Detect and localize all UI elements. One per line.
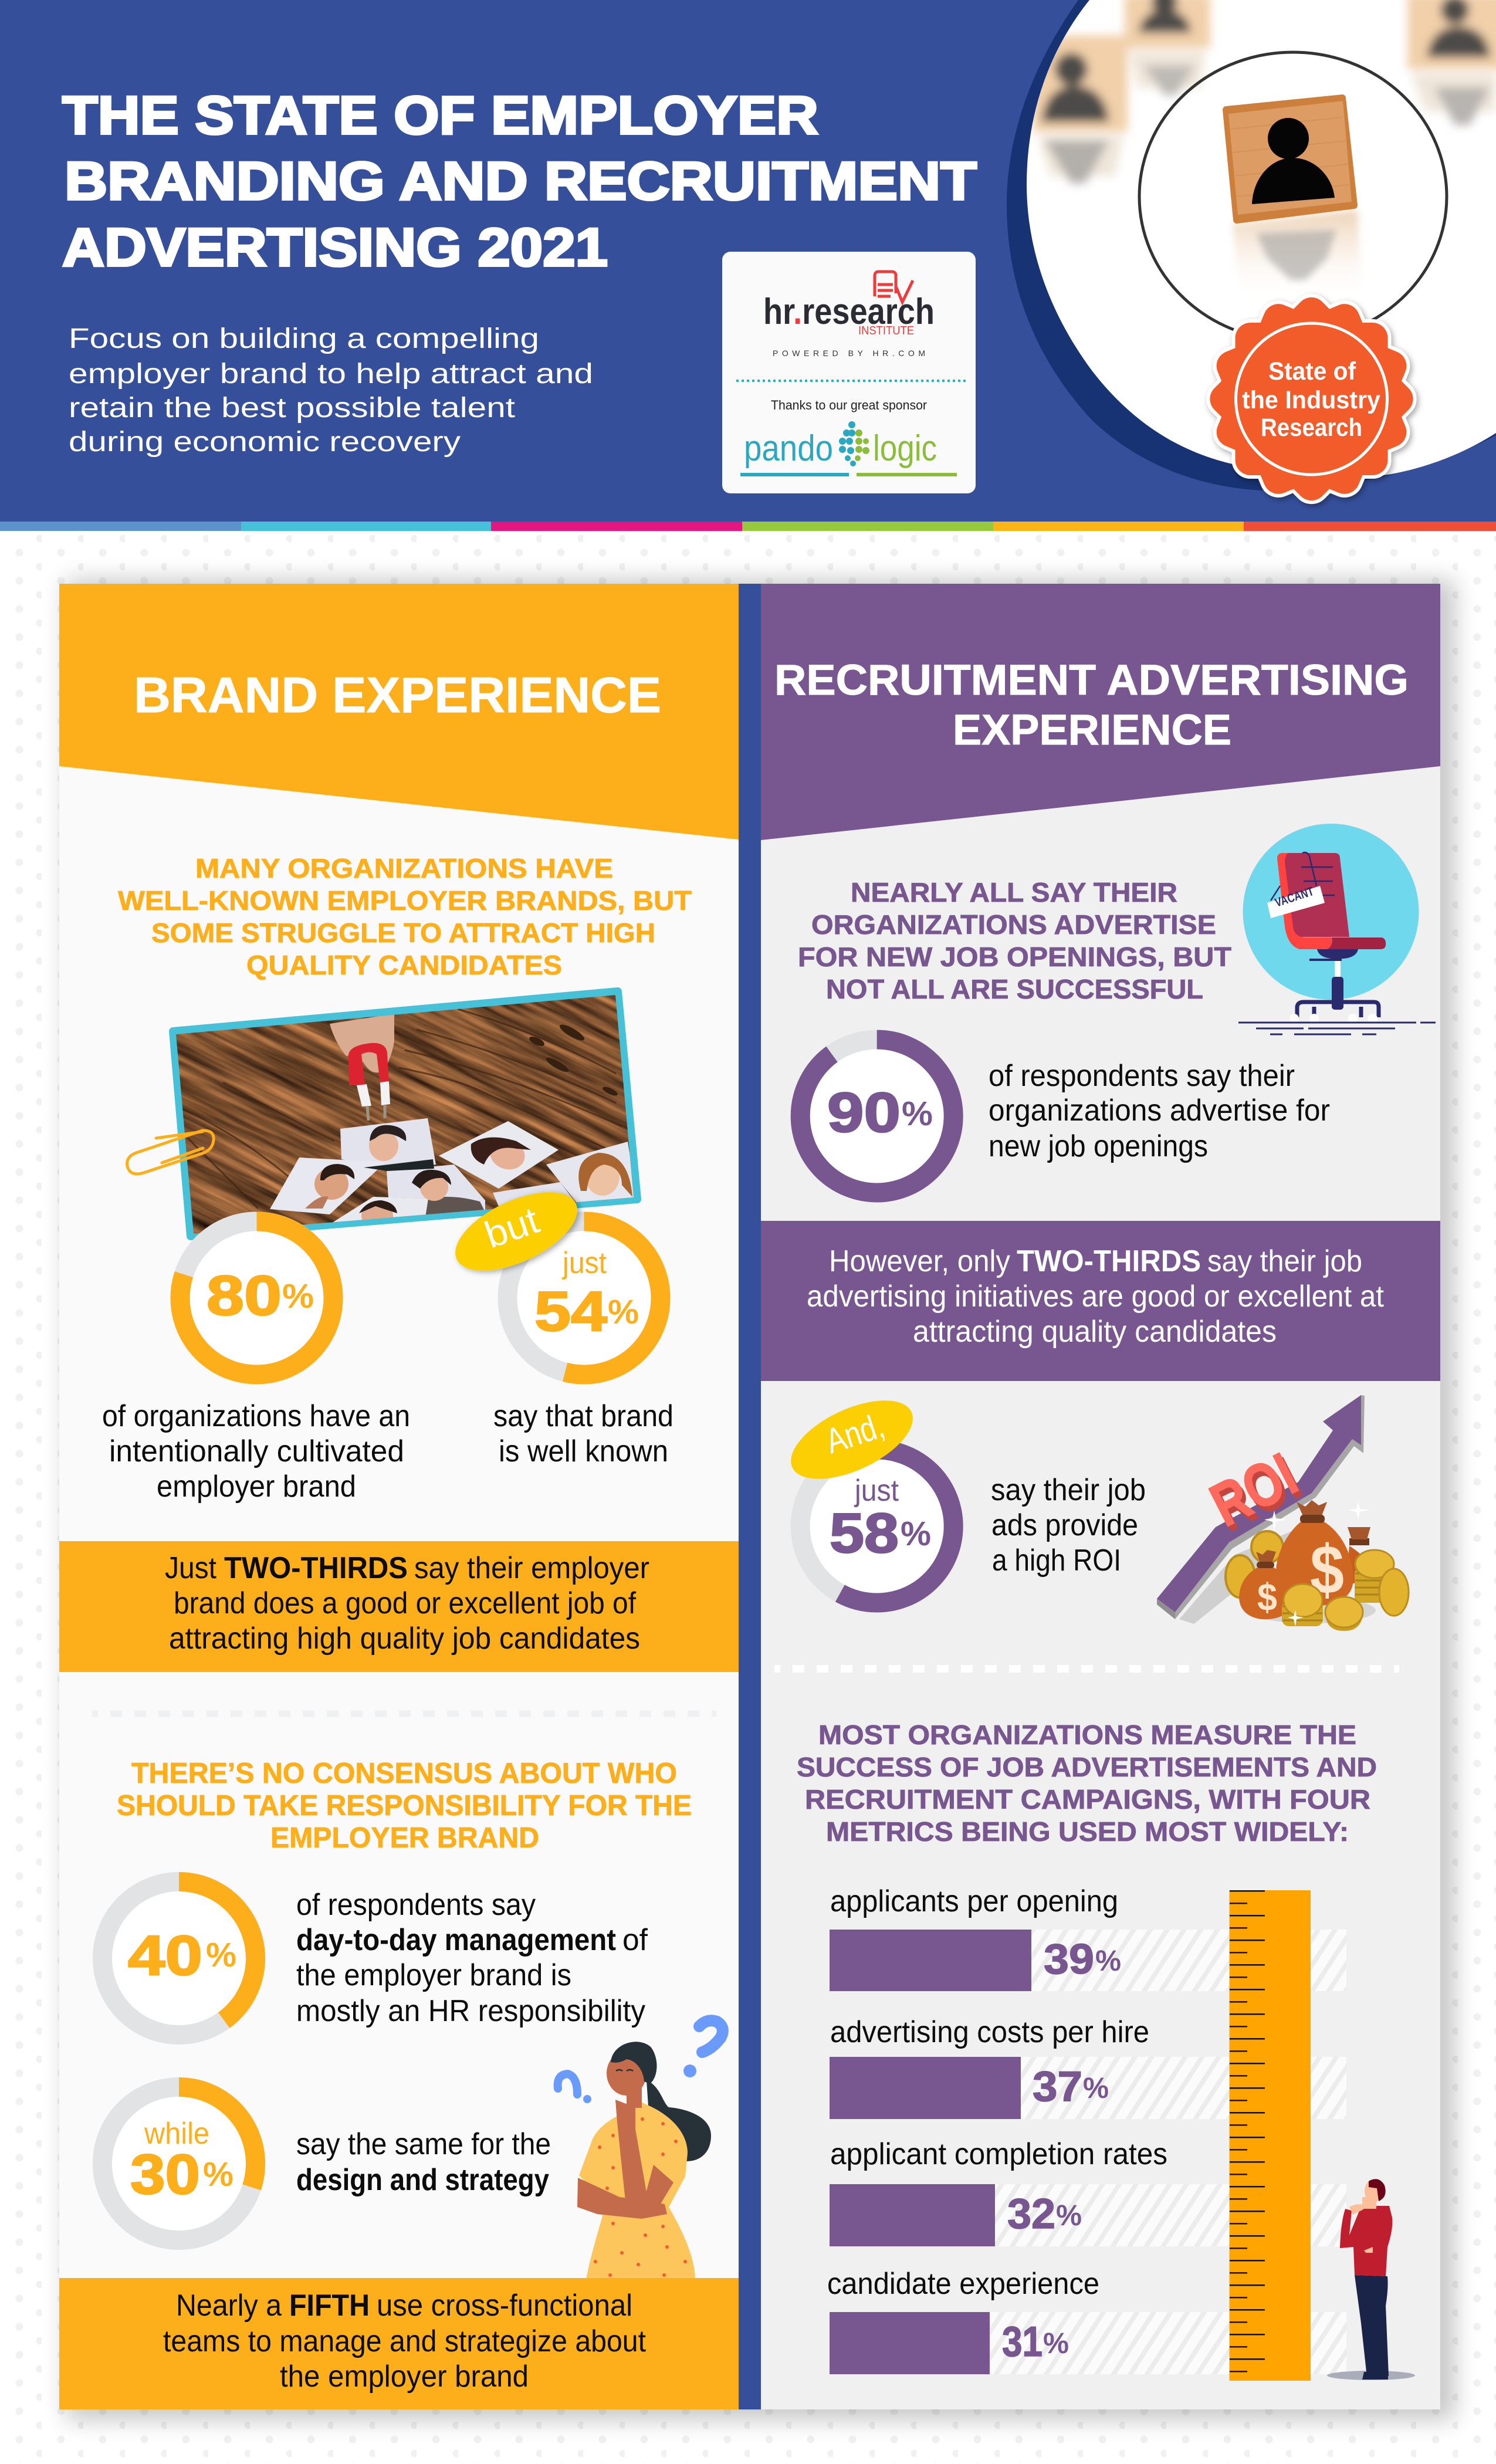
subheading: well-known brands: QUALITY CANDIDATES	[246, 950, 562, 980]
panel shadow	[66, 580, 1455, 2420]
donut chart: 30%: while	[144, 2117, 209, 2151]
sign: vacant	[1267, 885, 1325, 918]
illustration: man looking at ruler	[1327, 2179, 1415, 2380]
caption: 80%: of organizations have an	[102, 1399, 410, 1433]
subheading: no consensus: THERE’S NO CONSENSUS ABOUT WHO	[131, 1758, 677, 1789]
subheading: nearly all	[798, 877, 1231, 1004]
caption: 80%: intentionally cultivated	[109, 1434, 404, 1468]
logo text: hr.research	[763, 292, 935, 332]
donut chart: 80%: 80	[207, 1264, 282, 1327]
callout band: two-thirds: Just	[165, 1551, 217, 1585]
subtitle: during economic recovery	[69, 427, 461, 458]
subheading: well-known brands: SOME STRUGGLE TO ATTRACT HIGH	[151, 918, 655, 948]
subheading: most organizations measure	[797, 1720, 1377, 1847]
donut chart: 90%: %	[902, 1095, 933, 1133]
panel: brand experience	[59, 584, 739, 2409]
icon: small money bag behind	[1346, 1527, 1377, 1584]
callout band: a fifth: the employer brand	[280, 2360, 529, 2394]
logo card	[722, 252, 976, 493]
heading: brand experience: BRAND EXPERIENCE	[134, 668, 661, 723]
text: day-to-day management: of respondents say	[296, 1888, 536, 1922]
donut chart: 58%: 58	[830, 1502, 899, 1565]
donut chart: 58%: %	[901, 1515, 931, 1553]
donut chart: 58%: just	[854, 1474, 899, 1508]
text: high roi: say their job	[991, 1473, 1146, 1507]
text: roi: ROI	[1204, 1445, 1311, 1544]
callout band: two-thirds: TWO-THIRDS	[224, 1551, 408, 1585]
bar: applicant completion rates	[830, 2137, 1346, 2246]
text: high roi: ads provide	[991, 1508, 1138, 1542]
icon: large money bag	[1276, 1500, 1353, 1609]
bar: applicants per opening: applicants per opening	[830, 1884, 1118, 1918]
text: day-to-day management: day-to-day management	[296, 1923, 616, 1957]
donut chart: 40%: 40	[128, 1924, 202, 1987]
panel: recruitment advertising experience	[761, 584, 1440, 2409]
caption: 54%: say that brand	[493, 1399, 673, 1433]
ruler	[1230, 1890, 1311, 2381]
subtitle	[69, 323, 593, 458]
text: design and strategy: say the same for the	[296, 2127, 551, 2161]
illustration: vacant chair	[1238, 824, 1436, 1034]
callout: and: And,	[821, 1406, 889, 1461]
sign: vacant: VACANT	[1273, 885, 1315, 910]
callout: but: but	[479, 1199, 544, 1256]
text: roi: ROI	[1200, 1440, 1308, 1539]
bar: candidate experience	[827, 2267, 1346, 2374]
text: day-to-day management	[296, 1888, 648, 2028]
bar: advertising costs per hire: 37	[1033, 2063, 1082, 2110]
bar: applicant completion rates: applicant completion rates	[830, 2137, 1167, 2171]
icon: coin stacks	[1282, 1550, 1409, 1631]
callout band: a fifth: use cross-functional	[377, 2289, 632, 2323]
text: day-to-day management: the employer brand is	[296, 1958, 571, 1992]
callout band: a fifth: teams to manage and strategize about	[163, 2324, 647, 2358]
heading: recruitment advertising: RECRUITMENT ADVERTISING	[774, 656, 1409, 704]
bar: candidate experience: %	[1043, 2327, 1069, 2360]
donut chart: 40%	[93, 1872, 265, 2045]
header banner	[0, 0, 1496, 522]
subtitle: employer brand to help attract and	[69, 358, 593, 390]
text: day-to-day management: of	[622, 1923, 648, 1957]
donut chart: 40%: %	[206, 1936, 236, 1974]
callout band: two-thirds: attracting high quality job candidates	[169, 1622, 640, 1656]
icon: question marks	[558, 2020, 723, 2103]
illustration: thinking woman	[558, 2020, 723, 2280]
caption: 80%	[102, 1399, 410, 1504]
center divider strip	[739, 584, 761, 2409]
callout band: two-thirds: advertising initiatives are good or excellent at	[807, 1280, 1385, 1314]
callout: but	[444, 1176, 588, 1287]
donut chart: 54%: 54	[534, 1280, 607, 1343]
callout band: two-thirds: say their job	[1207, 1244, 1362, 1278]
badge: state of the industry research	[1204, 291, 1419, 507]
text: respondents advertise: of respondents say their	[989, 1059, 1295, 1093]
callout band: two-thirds	[59, 1541, 739, 1672]
text: high roi: a high ROI	[992, 1544, 1121, 1578]
subheading: most organizations measure: SUCCESS OF JOB ADVERTISEMENTS AND	[797, 1752, 1377, 1782]
callout band: a fifth: FIFTH	[289, 2289, 370, 2323]
bar: advertising costs per hire: %	[1083, 2072, 1109, 2104]
text: design and strategy	[296, 2127, 551, 2197]
bar: candidate experience: candidate experience	[827, 2267, 1099, 2301]
callout band: two-thirds: However, only	[829, 1244, 1010, 1278]
bar: advertising costs per hire	[830, 2015, 1346, 2119]
title	[62, 86, 977, 277]
photo: magnet attracting candidates	[169, 987, 641, 1240]
logo text: INSTITUTE	[858, 324, 914, 337]
callout band: a fifth	[59, 2278, 739, 2409]
donut chart: 90%	[791, 1030, 963, 1203]
text: high roi	[991, 1473, 1146, 1578]
text: respondents advertise: organizations advertise for	[989, 1094, 1330, 1128]
callout band: two-thirds: brand does a good or excellent job of	[174, 1586, 637, 1620]
donut chart: 54%: %	[608, 1293, 639, 1331]
heading: recruitment advertising: EXPERIENCE	[953, 706, 1231, 754]
text: respondents advertise: new job openings	[989, 1129, 1208, 1163]
icon: red document	[875, 272, 913, 302]
icon: small money bag front	[1239, 1550, 1291, 1619]
donut chart: 80%	[170, 1212, 343, 1385]
pandologic logo	[740, 421, 957, 476]
donut chart: 54%: just	[561, 1246, 607, 1280]
icon: paperclip	[127, 1131, 214, 1174]
icon: hand holding magnet	[330, 1014, 394, 1121]
callout: and	[780, 1385, 924, 1495]
callout band: two-thirds	[761, 1221, 1440, 1381]
donut chart: 80%: %	[282, 1277, 314, 1315]
bar: applicant completion rates: %	[1056, 2199, 1082, 2232]
caption: 54%: is well known	[499, 1434, 668, 1468]
subheading: nearly all: NEARLY ALL SAY THEIR	[851, 877, 1177, 908]
donut chart: 54%	[497, 1212, 670, 1385]
text: design and strategy: design and strategy	[296, 2163, 549, 2197]
title: THE STATE OF EMPLOYER	[62, 86, 818, 145]
illustration: roi arrow and money bags	[1157, 1395, 1409, 1631]
caption: 80%: employer brand	[157, 1470, 356, 1504]
bar: applicants per opening: %	[1095, 1944, 1121, 1977]
bar: candidate experience: 31	[1002, 2319, 1043, 2365]
callout band: a fifth: Nearly a	[176, 2289, 282, 2323]
sponsor note: Thanks to our great sponsor	[771, 398, 927, 412]
subheading: no consensus	[117, 1758, 692, 1854]
candidate photos	[270, 1118, 637, 1228]
icon: large money bag: $	[1310, 1531, 1344, 1609]
bar: applicants per opening: 39	[1044, 1936, 1094, 1983]
callout band: two-thirds: say their employer	[414, 1551, 649, 1585]
badge: state of the industry research: State of	[1268, 357, 1356, 385]
bar: advertising costs per hire: advertising costs per hire	[830, 2015, 1149, 2049]
panel header	[59, 584, 739, 840]
logo text	[763, 292, 935, 358]
icon: wood block with person silhouette	[1226, 98, 1354, 220]
heading: recruitment advertising	[774, 656, 1409, 754]
subtitle: retain the best possible talent	[69, 392, 515, 424]
subtitle: Focus on building a compelling	[69, 323, 539, 354]
title: ADVERTISING 2021	[62, 218, 608, 277]
subheading: nearly all: NOT ALL ARE SUCCESSFUL	[826, 974, 1203, 1004]
subheading: most organizations measure: METRICS BEING USED MOST WIDELY:	[826, 1816, 1349, 1847]
subheading: nearly all: FOR NEW JOB OPENINGS, BUT	[798, 942, 1231, 972]
donut chart: 30%: %	[203, 2155, 233, 2194]
title: BRANDING AND RECRUITMENT	[65, 151, 977, 211]
subheading: well-known brands	[118, 853, 692, 980]
bar: applicants per opening	[830, 1884, 1346, 1991]
donut chart: 90%: 90	[827, 1081, 901, 1144]
pandologic logo: logic	[873, 428, 937, 469]
subheading: no consensus: EMPLOYER BRAND	[270, 1822, 539, 1854]
donut chart: 58%	[791, 1440, 963, 1612]
callout band: two-thirds: TWO-THIRDS	[1017, 1244, 1201, 1278]
callout band: two-thirds: attracting quality candidates	[913, 1315, 1277, 1349]
caption: 54%	[493, 1399, 673, 1468]
subheading: most organizations measure: MOST ORGANIZATIONS MEASURE THE	[818, 1720, 1356, 1750]
colour stripe	[0, 522, 1496, 531]
panel header	[761, 584, 1440, 840]
subheading: well-known brands: MANY ORGANIZATIONS HAVE	[195, 853, 613, 884]
icon: small money bag front: $	[1257, 1575, 1277, 1619]
subheading: no consensus: SHOULD TAKE RESPONSIBILITY FOR THE	[117, 1790, 692, 1822]
subheading: nearly all: ORGANIZATIONS ADVERTISE	[811, 909, 1216, 940]
subheading: most organizations measure: RECRUITMENT CAMPAIGNS, WITH FOUR	[805, 1784, 1370, 1815]
subheading: well-known brands: WELL-KNOWN EMPLOYER BRANDS, BUT	[118, 885, 692, 916]
hero image circle	[1007, 0, 1496, 490]
donut chart: 30%	[93, 2077, 265, 2250]
badge: state of the industry research: Research	[1261, 414, 1362, 442]
pandologic logo: pando	[744, 428, 833, 469]
donut chart: 30%: 30	[130, 2143, 200, 2206]
logo text: POWERED BY HR.COM	[773, 348, 925, 358]
text: respondents advertise	[989, 1059, 1330, 1163]
bar: applicant completion rates: 32	[1007, 2191, 1055, 2238]
badge: state of the industry research: the Industry	[1242, 386, 1380, 414]
icon: ring	[1139, 52, 1447, 341]
bar chart: metrics	[827, 1884, 1346, 2374]
text: day-to-day management: mostly an HR responsibility	[296, 1994, 645, 2028]
